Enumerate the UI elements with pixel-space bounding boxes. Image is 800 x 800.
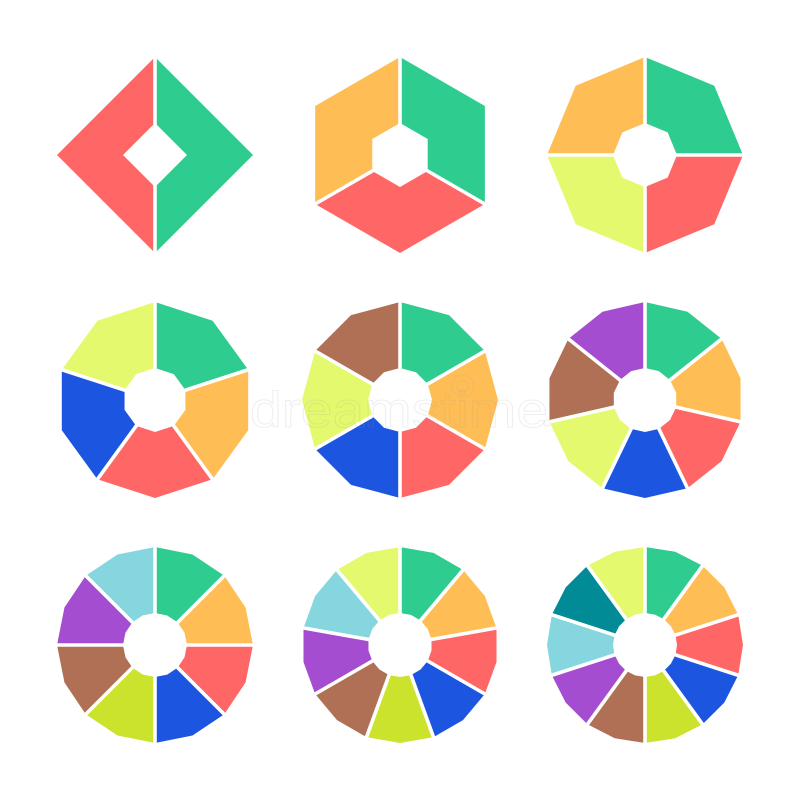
segment: blue	[122, 661, 224, 763]
segment: purple	[284, 603, 379, 694]
segment: green	[400, 547, 463, 620]
diamond ring: 2 segments	[57, 53, 253, 257]
segment: yellow	[337, 529, 432, 626]
segment: red	[647, 404, 741, 497]
segment: purple	[541, 632, 630, 724]
segment: blue	[22, 353, 149, 479]
segment: orange	[164, 370, 277, 486]
segment: brown	[315, 278, 429, 392]
segment: green	[155, 302, 248, 390]
segment: red	[85, 408, 213, 534]
segment: red	[670, 615, 756, 692]
segment: cyan	[303, 566, 387, 641]
segment: brown	[37, 612, 139, 714]
segment: green	[645, 302, 722, 380]
segment: yellow	[547, 155, 645, 253]
segment: lime	[349, 668, 434, 759]
decagon ring: 5 segments	[22, 281, 277, 534]
segment: green	[155, 547, 224, 622]
segment: orange	[171, 576, 273, 678]
watermark: dreamstime	[250, 382, 548, 438]
segment: yellow	[62, 281, 174, 397]
segment: green	[645, 547, 703, 619]
octagon ring: 4 segments	[543, 53, 747, 257]
segment: lime	[614, 666, 703, 758]
segment: red	[424, 628, 507, 703]
segment: brown	[532, 330, 626, 422]
segment: green	[400, 302, 485, 384]
segment: green	[400, 57, 485, 204]
segment: blue	[315, 416, 400, 498]
segment: orange	[661, 339, 769, 447]
segment: blue	[390, 657, 485, 749]
hexagon ring: 3 segments	[273, 53, 488, 277]
segment: green	[645, 57, 743, 155]
segment: orange	[414, 351, 527, 465]
segment: cyan	[86, 527, 188, 629]
segment: brown	[587, 671, 645, 743]
segment: lime	[86, 668, 155, 743]
segment: blue	[585, 418, 688, 522]
dodecagon ring: 6 segments	[273, 278, 527, 522]
segment: red	[315, 130, 485, 277]
20-sided ring: 10 segments	[534, 532, 756, 758]
segment: blue	[652, 653, 738, 730]
18-sided ring: 9 segments	[284, 529, 511, 759]
segment: brown	[307, 646, 392, 737]
segment: orange	[273, 57, 442, 204]
segment: red	[178, 645, 253, 714]
segment: teal	[552, 560, 638, 637]
segment: purple	[57, 576, 132, 645]
segment: red	[371, 408, 485, 522]
segment: purple	[568, 279, 677, 388]
segment: cyan	[534, 598, 620, 675]
segment: orange	[547, 57, 645, 155]
segment: orange	[416, 570, 511, 667]
16-sided ring: 8 segments	[37, 527, 273, 763]
14-sided ring: 7 segments	[532, 279, 769, 522]
segment: yellow	[273, 335, 386, 449]
segment: yellow	[587, 532, 676, 624]
segment: orange	[660, 566, 749, 658]
segment: yellow	[533, 385, 636, 488]
segment: green	[155, 57, 253, 253]
segment: red	[645, 155, 743, 253]
segment: red	[57, 57, 155, 253]
